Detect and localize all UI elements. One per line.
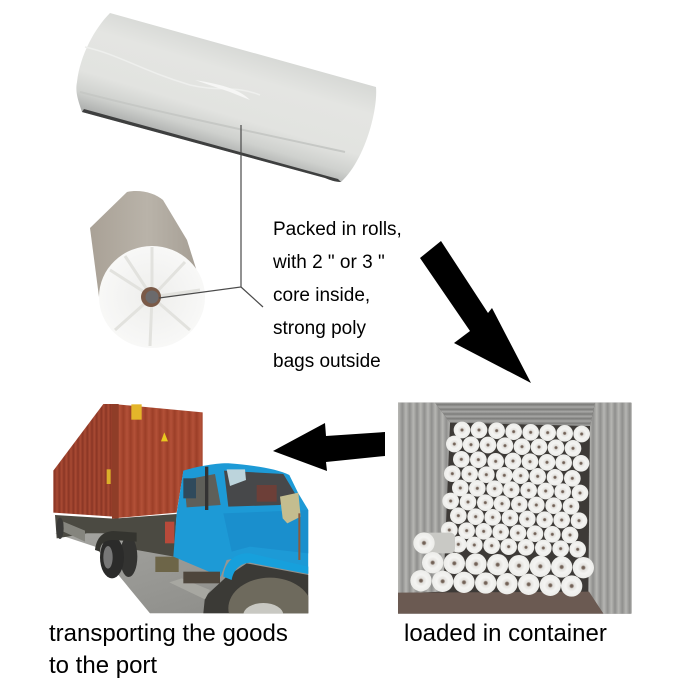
roof	[435, 403, 595, 426]
photo: small roll with visible core	[90, 191, 205, 348]
text: packing description: bags outside	[273, 351, 381, 372]
trailer wheels	[122, 540, 138, 577]
caption: truck: to the port	[49, 652, 157, 679]
text: packing description: core inside,	[273, 285, 370, 306]
photo: truck with container	[53, 404, 308, 614]
shipping container rear	[113, 404, 203, 518]
container labels	[131, 404, 142, 420]
truck cab	[173, 463, 308, 577]
text: packing description: with 2 " or 3 "	[272, 252, 385, 273]
container back wall	[398, 403, 631, 614]
step	[169, 578, 210, 599]
shipping container side	[53, 404, 113, 517]
arrow: container to truck	[273, 423, 385, 471]
right wall	[588, 403, 631, 614]
callout leader lines	[159, 125, 263, 307]
left wall	[398, 403, 450, 593]
caption: truck: transporting the goods	[49, 620, 288, 647]
photo: loaded container interior	[398, 403, 631, 614]
road	[55, 533, 308, 613]
text: packing description: strong poly	[273, 318, 366, 339]
caption: container: loaded in container	[404, 620, 607, 647]
fender and front wheel	[203, 563, 308, 613]
mirror	[280, 493, 301, 523]
roll end faces	[410, 422, 594, 597]
floor	[398, 592, 603, 614]
photo: large wrapped roll	[76, 13, 376, 182]
windows	[184, 474, 221, 507]
text: packing description: Packed in rolls,	[273, 219, 402, 240]
arrow: roll to container	[420, 241, 531, 383]
chassis	[55, 514, 177, 557]
